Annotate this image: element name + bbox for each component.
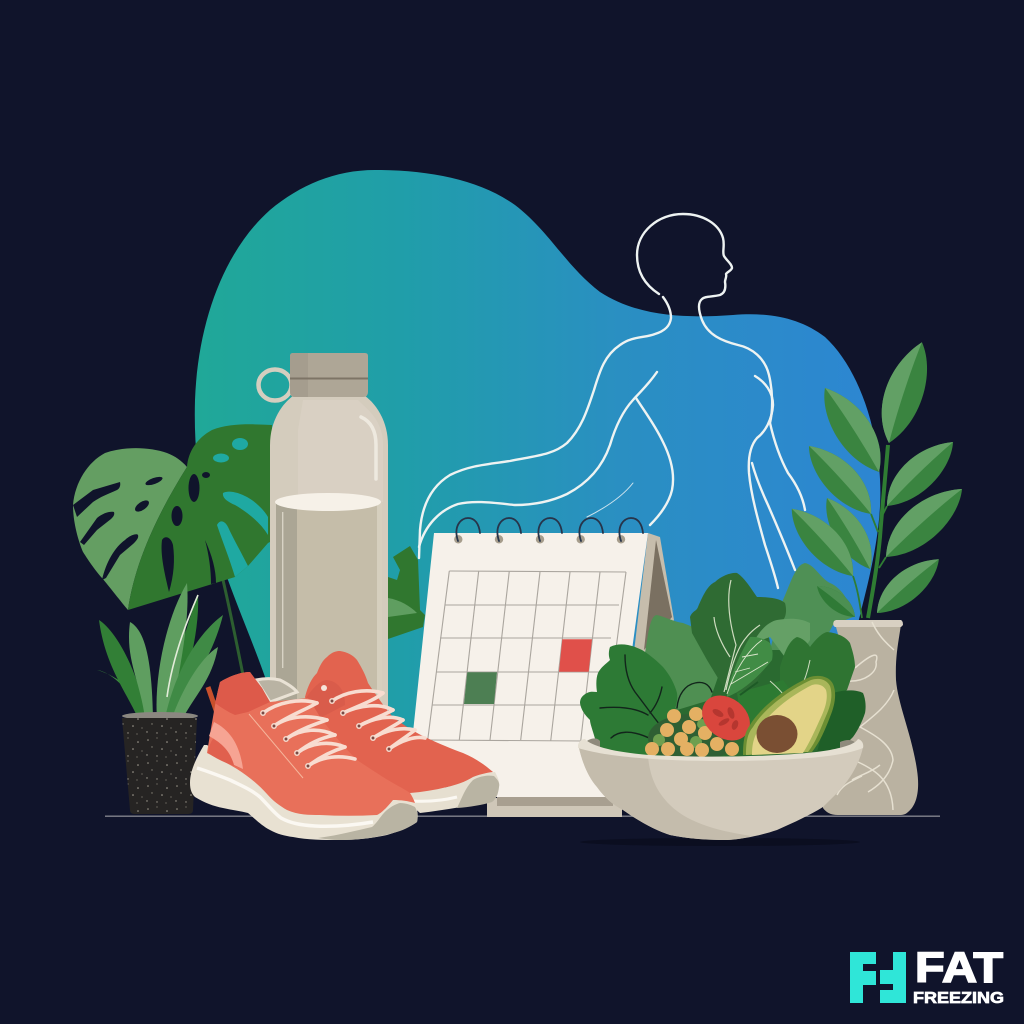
plant stem — [868, 445, 888, 618]
tall leafy plant — [781, 336, 973, 623]
front shoe sole — [190, 745, 418, 840]
back shoe laces — [332, 691, 425, 749]
front shoe toe cap — [318, 803, 418, 840]
logo icon — [850, 952, 906, 1003]
vase body — [820, 624, 918, 815]
pale lettuce leaf — [645, 615, 719, 710]
avocado half — [743, 676, 835, 755]
small snake plant — [97, 583, 223, 814]
gradient blob — [195, 170, 880, 760]
front running shoe — [190, 672, 418, 840]
brand logo — [850, 944, 1004, 1007]
black speckled pot — [122, 718, 197, 814]
vase swirl lines — [837, 622, 894, 810]
back shoe sole — [405, 772, 499, 813]
light half of monstera — [73, 448, 187, 610]
logo wordmark FREEZING: FREEZING — [913, 990, 1004, 1007]
bowl rim — [578, 739, 863, 761]
leaf 2 — [811, 378, 895, 481]
dark lettuce veins — [714, 580, 760, 692]
calendar page — [412, 533, 648, 797]
human body outline — [419, 214, 805, 588]
front shoe eyelets — [261, 711, 310, 768]
logo wordmark FAT: FAT — [915, 944, 1003, 992]
monstera slits — [73, 472, 216, 592]
leaf 9 — [812, 579, 861, 623]
chickpeas — [645, 707, 739, 762]
greens backing — [640, 650, 840, 760]
bottle water — [276, 502, 382, 720]
monstera gaps — [213, 438, 268, 577]
avocado pit — [756, 715, 798, 753]
front left leaf — [580, 644, 677, 758]
right dark lettuce — [780, 632, 855, 700]
bottle loop — [258, 370, 292, 400]
back shoe top eyelet — [321, 685, 327, 691]
leaf 3 — [875, 430, 964, 517]
calendar stand back — [634, 533, 674, 652]
red calendar cell — [559, 639, 592, 672]
salad greens — [580, 573, 866, 760]
top right lettuce — [770, 563, 853, 650]
dark half of monstera — [128, 424, 272, 610]
green peas — [653, 719, 707, 748]
monstera leaf stem — [223, 580, 243, 675]
avocado rim — [746, 679, 831, 755]
calendar grid — [428, 571, 626, 741]
leaf 6 — [815, 490, 883, 576]
tomato slice — [693, 686, 759, 750]
desk calendar — [412, 518, 674, 817]
back shoe eyelets — [330, 699, 391, 751]
leaf 5 — [873, 475, 973, 570]
branches — [853, 506, 887, 618]
front shoe collar — [215, 672, 270, 715]
bottle highlight — [361, 417, 376, 479]
shoe opening — [256, 678, 297, 702]
pot rim — [122, 712, 198, 720]
ceramic vase — [820, 620, 918, 815]
back shoe toe cap — [457, 776, 499, 808]
front shoe heel stripe — [209, 722, 243, 769]
front leaf veins — [600, 655, 712, 740]
leaf 8 — [781, 497, 866, 586]
vase lip — [833, 620, 903, 627]
green calendar cell — [464, 672, 497, 704]
leaf 1 — [870, 336, 939, 448]
shoe stitch line — [249, 714, 303, 778]
bottle cap — [290, 353, 368, 397]
monstera leaf — [73, 424, 272, 610]
salad bowl — [578, 738, 863, 840]
bowl inner shadow — [582, 738, 600, 752]
small leaf behind calendar — [388, 546, 425, 639]
front shoe white stripe — [197, 768, 373, 826]
bowl shaded side — [579, 748, 752, 840]
back running shoe — [302, 651, 499, 813]
calendar base — [487, 798, 622, 817]
bottle body — [270, 396, 388, 720]
back shoe white stripe — [413, 797, 457, 801]
bowl ground shadow — [580, 838, 860, 846]
ground line — [105, 816, 940, 817]
front shoe upper — [207, 672, 415, 816]
bottom centre leaf — [737, 680, 800, 737]
front shoe heel patch — [208, 737, 241, 768]
back shoe upper — [305, 651, 493, 793]
leaf 7 — [867, 548, 948, 623]
back shoe fold — [302, 680, 345, 718]
water bottle — [258, 353, 388, 720]
bowl body — [579, 747, 863, 840]
plant leaves — [97, 670, 150, 718]
front shoe laces — [263, 701, 355, 766]
centre leaf veins — [727, 640, 768, 694]
right bottom dark leaf — [817, 690, 866, 752]
water surface — [275, 493, 381, 511]
calendar binding rings — [454, 535, 625, 544]
light overlapping leaf — [753, 619, 810, 660]
avocado skin — [743, 676, 835, 755]
veined centre leaf — [727, 637, 773, 697]
avocado flesh — [752, 684, 827, 755]
dark central lettuce — [690, 573, 786, 693]
leaf 4 — [798, 434, 884, 524]
orange pull tab — [208, 687, 217, 713]
